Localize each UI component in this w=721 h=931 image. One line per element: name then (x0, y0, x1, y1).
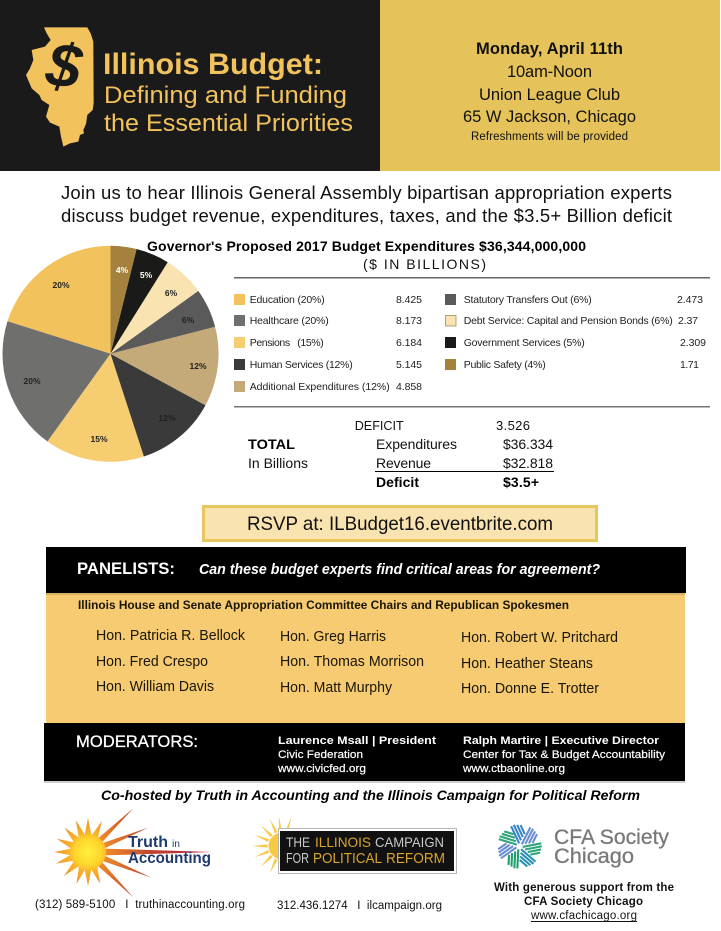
panel: moderators: Laurence Msall | President (278, 735, 436, 747)
deficit summary table: In Billions (248, 455, 308, 471)
logo: CFA Society Chicago: Chicago (554, 845, 634, 868)
panel: panelists banner: PANELISTS: (77, 560, 175, 578)
icon: Illinois map with dollar sign (26, 27, 94, 147)
logo: CFA Society Chicago (496, 822, 669, 868)
RSVP callout: RSVP at: ILBudget16.eventbrite.com (247, 513, 553, 535)
pie chart: budget expenditures: 12% (158, 413, 176, 423)
panel: panelists names: Hon. Patricia R. Bellock (96, 628, 246, 644)
panel: panelists names: Illinois House and Senate Appropriation Committee Chairs and Republican Spokesmen (78, 600, 569, 612)
legend: budget categories: 8.173 (396, 315, 422, 327)
pie chart: budget expenditures: 5% (140, 270, 153, 280)
logo: Truth in Accounting (54, 806, 212, 899)
logo: Illinois Campaign for Political Reform: ILLINOIS (315, 834, 371, 850)
deficit summary table: DEFICIT (355, 418, 404, 433)
panel: panelists banner: Can these budget experts find critical areas for agreement? (199, 561, 600, 578)
intro text: discuss budget revenue, expenditures, taxes, and the $3.5+ Billion deficit (61, 205, 672, 226)
legend: budget categories: 2.473 (677, 294, 703, 306)
panel: moderators: Center for Tax & Budget Accountability (463, 749, 666, 761)
panel: panelists banner (46, 547, 686, 593)
RSVP callout (204, 506, 596, 540)
legend: budget categories: 4.858 (396, 381, 422, 393)
pie chart: budget expenditures: 12% (189, 361, 207, 371)
pie chart: budget expenditures: 20% (52, 280, 70, 290)
legend: budget categories: Statutory Transfers Out (6%) (464, 294, 592, 306)
logo: Illinois Campaign for Political Reform: CAMPAIGN (375, 834, 444, 850)
panel: moderators: www.ctbaonline.org (462, 763, 565, 775)
deficit summary table: Deficit (376, 474, 419, 490)
title: Defining and Funding (104, 82, 347, 109)
panel: panelists names: Hon. Heather Steans (461, 656, 593, 672)
logo: Illinois Campaign for Political Reform: FOR (286, 850, 309, 867)
title: the Essential Priorities (104, 110, 353, 137)
panel: panelists names: Hon. Greg Harris (280, 629, 386, 645)
logo: CFA Society Chicago: CFA Society (554, 826, 669, 849)
legend: budget categories: 2.37 (678, 315, 698, 327)
deficit summary table: 3.526 (496, 418, 530, 433)
legend: budget categories: Human Services (12%) (250, 359, 353, 371)
title (103, 48, 353, 137)
title: Illinois Budget: (103, 48, 323, 81)
header: event details panel: Monday, April 11th (476, 40, 623, 58)
legend: budget categories: 1.71 (680, 359, 699, 371)
header: event details panel: Union League Club (479, 86, 620, 104)
legend: budget categories: Debt Service: Capital and Pension Bonds (6%) (464, 315, 673, 327)
panel: moderators: Ralph Martire | Executive Director (463, 735, 660, 747)
logo: Truth in Accounting: in (172, 839, 180, 850)
legend: budget categories: Public Safety (4%) (464, 359, 546, 371)
contact: Illinois Campaign: 312.436.1274 I ilcampaign.org (277, 900, 442, 912)
legend: budget categories: Government Services (5%) (464, 337, 585, 349)
legend: budget categories: Additional Expenditures (12%) (250, 381, 390, 393)
legend: budget categories: Healthcare (20%) (250, 315, 329, 327)
logo: Truth in Accounting: Accounting (128, 850, 211, 867)
legend: budget categories: 6.184 (396, 337, 422, 349)
legend: budget categories: 8.425 (396, 294, 422, 306)
deficit summary table: Expenditures (376, 436, 457, 452)
pie chart: budget expenditures (3, 246, 219, 462)
pie chart: budget expenditures: 6% (165, 288, 178, 298)
logo: Illinois Campaign for Political Reform: REFORM (386, 850, 445, 867)
chart heading: ($ IN BILLIONS) (363, 256, 486, 272)
panel: moderators (44, 723, 685, 783)
icon: Illinois map with dollar sign: $ (41, 30, 87, 103)
pie chart: budget expenditures: 6% (182, 315, 195, 325)
sponsor note: CFA Society Chicago: www.cfachicago.org (530, 910, 637, 922)
header: event details panel: 65 W Jackson, Chicago (463, 108, 636, 126)
legend: budget categories: 5.145 (396, 359, 422, 371)
pie chart: budget expenditures: 15% (90, 434, 108, 444)
logo: Truth in Accounting: Truth (128, 834, 168, 851)
header: event details panel (380, 0, 720, 171)
intro text (61, 182, 672, 226)
panel: moderators: MODERATORS: (76, 732, 198, 751)
deficit summary table: $36.334 (503, 436, 553, 452)
panel: panelists names: Hon. William Davis (96, 679, 214, 695)
panel: panelists names: Hon. Donne E. Trotter (461, 681, 599, 697)
logo: Illinois Campaign for Political Reform: POLITICAL (313, 850, 382, 867)
chart heading (147, 238, 586, 272)
logo: Illinois Campaign for Political Reform: THE (286, 834, 310, 850)
logo: Illinois Campaign for Political Reform (252, 816, 456, 876)
deficit summary table (248, 418, 554, 490)
legend: budget categories (234, 294, 706, 393)
co-hosts heading: Co-hosted by Truth in Accounting and the Illinois Campaign for Political Reform (101, 788, 640, 803)
panel: moderators: www.civicfed.org (277, 763, 366, 775)
legend: budget categories: Pensions (15%) (250, 337, 324, 349)
panel: panelists names: Hon. Thomas Morrison (280, 654, 424, 670)
deficit summary table: $3.5+ (503, 474, 539, 490)
contact: Truth in Accounting: (312) 589-5100 I truthinaccounting.org (35, 899, 245, 911)
header: dark title panel (0, 0, 380, 171)
pie chart: budget expenditures: 20% (23, 376, 41, 386)
sponsor note: CFA Society Chicago: CFA Society Chicago (524, 896, 643, 908)
panel: panelists names: Hon. Matt Murphy (280, 680, 393, 696)
intro text: Join us to hear Illinois General Assembly bipartisan appropriation experts (61, 182, 672, 203)
deficit summary table: $32.818 (503, 455, 553, 471)
panel: panelists names (46, 593, 685, 724)
header: event details panel: 10am-Noon (507, 63, 592, 81)
legend: budget categories: Education (20%) (250, 294, 325, 306)
panel: panelists names: Hon. Fred Crespo (96, 654, 208, 670)
deficit summary table: TOTAL (248, 436, 295, 452)
header: event details panel: Refreshments will be provided (471, 131, 628, 143)
chart heading: Governor's Proposed 2017 Budget Expenditures $36,344,000,000 (147, 238, 586, 254)
panel: panelists names: Hon. Robert W. Pritchard (461, 630, 618, 646)
sponsor note: CFA Society Chicago: With generous support from the (494, 882, 674, 894)
panel: moderators: Civic Federation (278, 749, 363, 761)
legend: budget categories: 2.309 (680, 337, 706, 349)
pie chart: budget expenditures: 4% (116, 265, 129, 275)
sponsor note: CFA Society Chicago (494, 882, 674, 922)
deficit summary table: Revenue (376, 455, 431, 471)
